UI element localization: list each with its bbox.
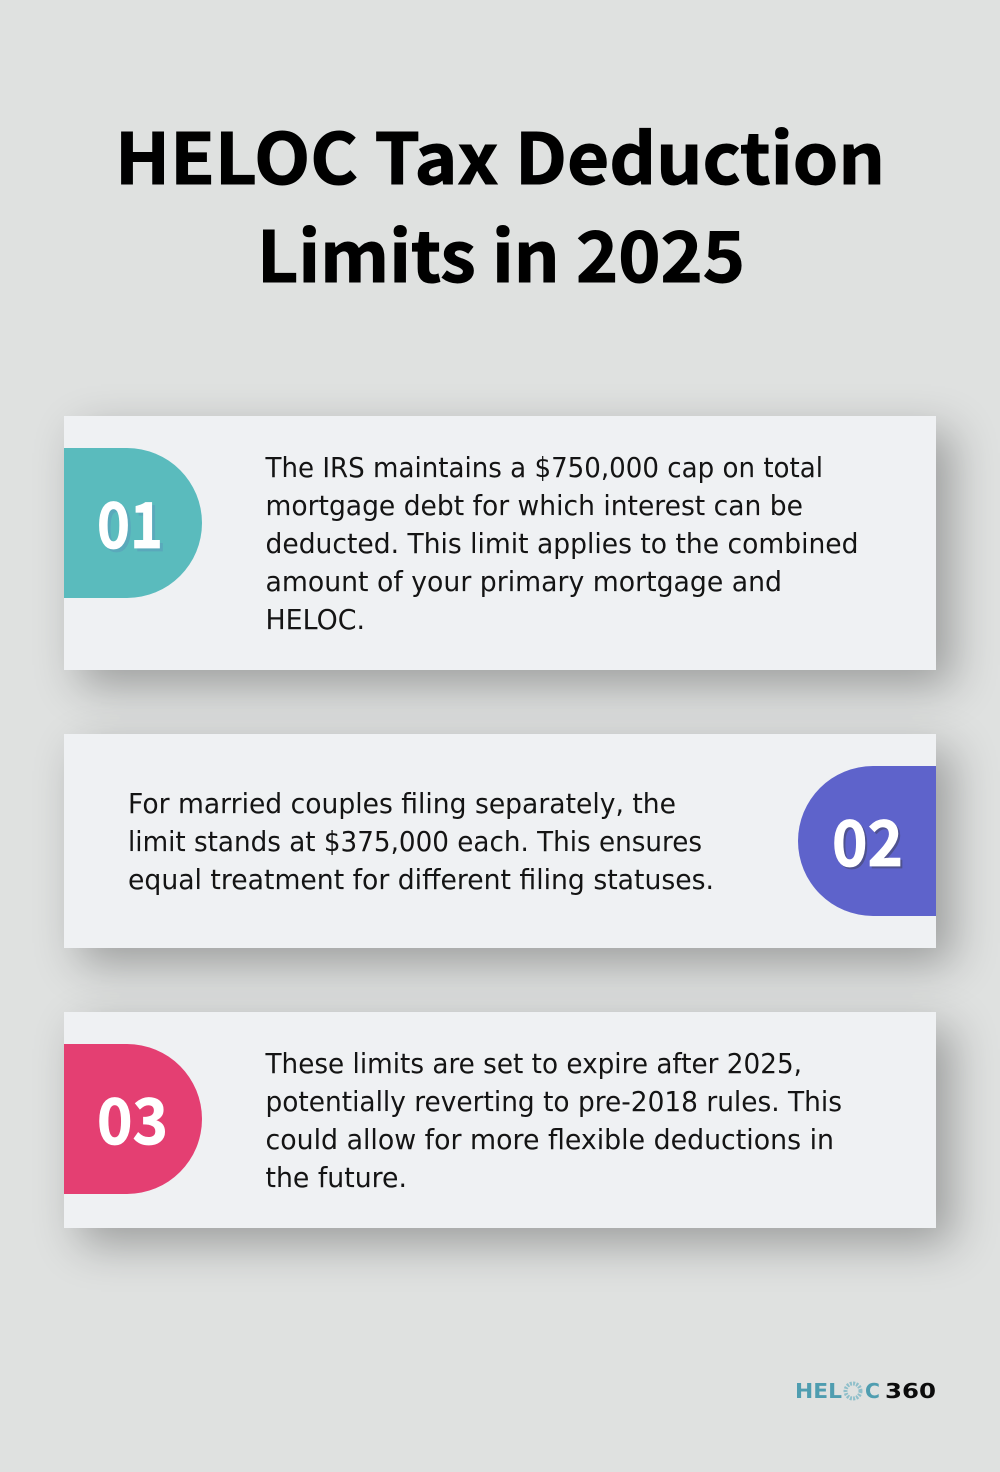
- badge: 03: [64, 1044, 202, 1194]
- logo: HELOC360: HEL: [795, 1379, 842, 1403]
- badge: 02: 02: [834, 796, 905, 887]
- text block: card 1: The IRS maintains a $750,000 cap on total: [265, 451, 823, 484]
- text block: card 2: equal treatment for different filing statuses.: [128, 863, 714, 896]
- logo: HELOC360: C: [865, 1379, 880, 1403]
- text block: card 1: HELOC.: [266, 603, 365, 636]
- panel: card 1 background: [64, 416, 936, 670]
- text block: card 3: These limits are set to expire after 2025,: [265, 1047, 802, 1080]
- text block: card 3: potentially reverting to pre-2018 rules. This: [266, 1085, 842, 1118]
- badge: 01: 01: [97, 476, 163, 567]
- panel: card 2 background: [64, 734, 936, 948]
- text block: card 2: For married couples filing separately, the: [128, 787, 676, 820]
- badge: 01: 01: [100, 479, 166, 570]
- badge: 02: 02: [832, 794, 903, 885]
- badge: 01: [64, 448, 202, 598]
- icon: logo swirl ring: [846, 1384, 860, 1398]
- badge: 03: 03: [97, 1072, 168, 1163]
- title: Limits in 2025: [257, 202, 745, 303]
- badge: 02: [798, 766, 936, 916]
- title: [115, 104, 885, 303]
- text block: card 2: limit stands at $375,000 each. This ensures: [128, 825, 702, 858]
- text block: card 3: the future.: [266, 1161, 407, 1194]
- text block: card 1: deducted. This limit applies to the combined: [266, 527, 858, 560]
- logo: HELOC360: [795, 1379, 936, 1403]
- text block: card 2: [128, 787, 714, 896]
- text block: card 1: amount of your primary mortgage and: [266, 565, 782, 598]
- panel: card 3 background: [64, 1012, 936, 1228]
- title: HELOC Tax Deduction: [115, 104, 885, 205]
- logo: HELOC360: 360: [885, 1379, 936, 1403]
- text block: card 1: mortgage debt for which interest can be: [266, 489, 803, 522]
- text block: card 1: [265, 451, 858, 636]
- text block: card 3: [265, 1047, 842, 1194]
- text block: card 3: could allow for more flexible deductions in: [266, 1123, 834, 1156]
